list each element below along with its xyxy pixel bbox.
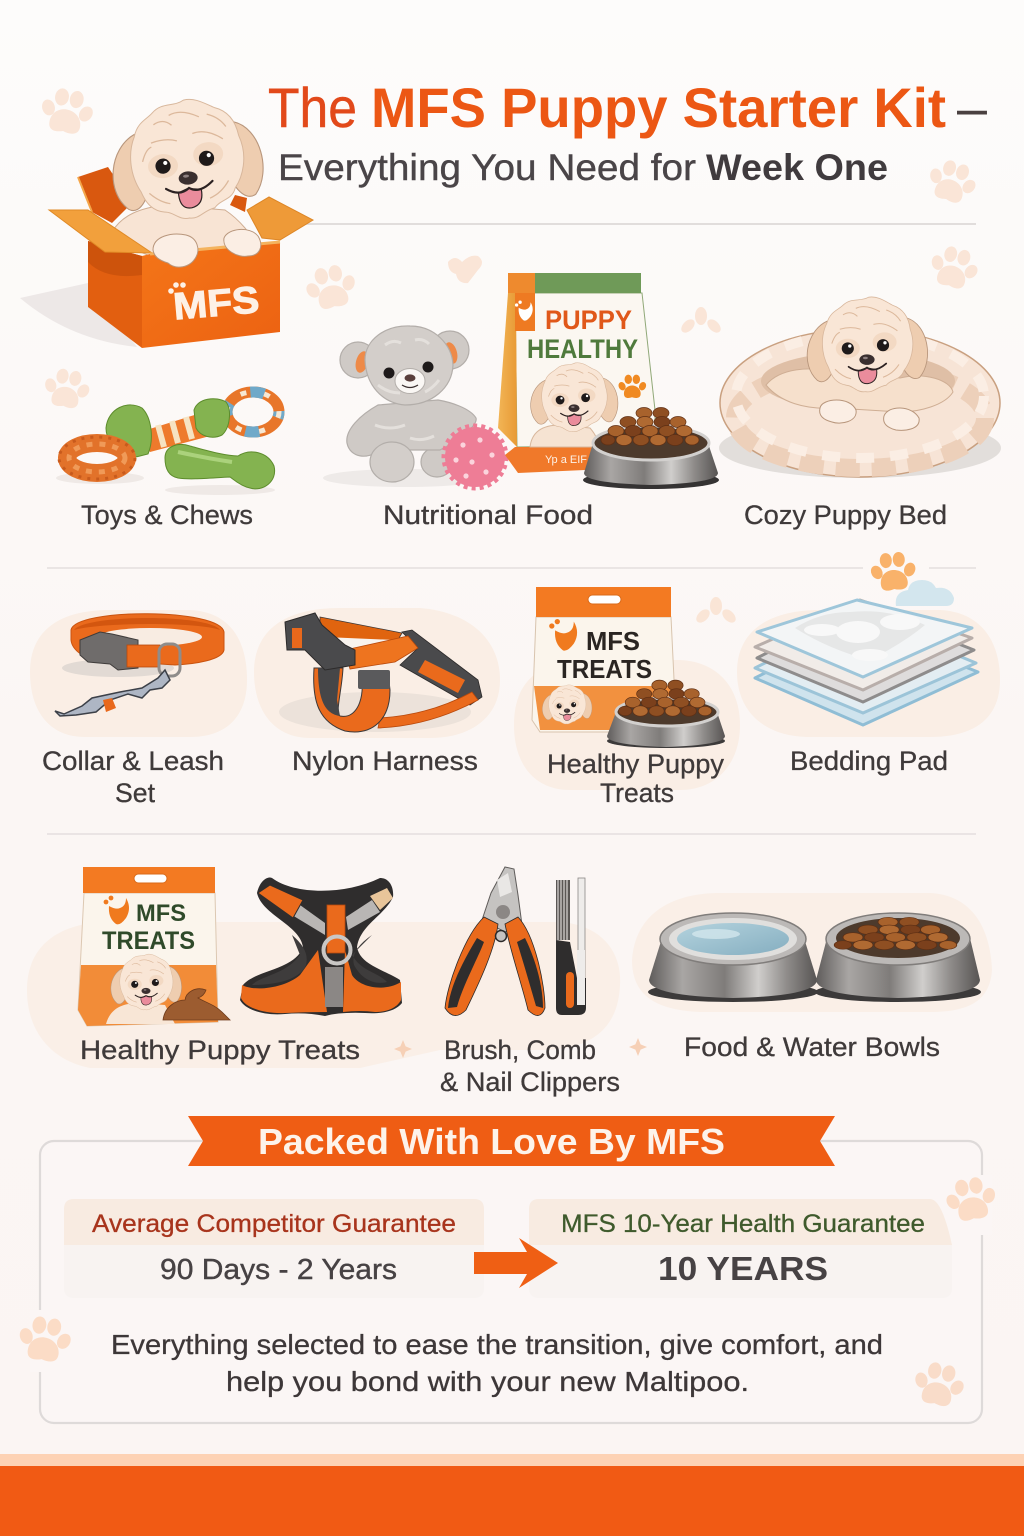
closing text: help you bond with your new Maltipoo. [226, 1366, 749, 1397]
row 3 background blobs [27, 893, 992, 1068]
label: bedding pad: Bedding Pad [790, 746, 948, 776]
footer band [0, 1454, 1024, 1536]
icon: nylon harness [279, 613, 482, 732]
icon: treats bag and bowl [532, 587, 725, 748]
icon: puppy food bag and bowl [498, 273, 719, 489]
table: average competitor [64, 1199, 484, 1298]
panel: guarantee [14, 1141, 1001, 1423]
icon: stacked bedding pads with sun paw and cloud [755, 550, 978, 725]
icon: treats bag: TREATS [102, 927, 195, 955]
icon: collar and leash [55, 614, 224, 716]
icon: puppy in MFS box: MFS [172, 279, 261, 329]
label: food and water bowls: Food & Water Bowls [684, 1032, 940, 1062]
label: nylon harness: Nylon Harness [292, 746, 478, 776]
panel paws [14, 1174, 1001, 1410]
title: The [268, 76, 357, 139]
background paw prints [36, 85, 984, 625]
icon: sparkle divider [394, 1040, 412, 1058]
label: brush comb and nail clippers: Brush, Comb [444, 1035, 596, 1065]
label: healthy puppy treats: Healthy Puppy [547, 749, 725, 779]
icon: plush teddy and pink ball [323, 326, 506, 488]
label: cozy puppy bed: Cozy Puppy Bed [744, 500, 947, 530]
icon: puppy food bag and bowl: PUPPY [545, 305, 632, 335]
label: healthy puppy treats: Treats [600, 778, 674, 808]
label: collar and leash set [42, 746, 224, 808]
banner [188, 1116, 835, 1166]
icon: puppy food bag and bowl: Yp a EIF U [545, 454, 598, 466]
table: average competitor: 90 Days - 2 Years [160, 1254, 397, 1286]
subtitle: Everything You Need for [278, 147, 696, 188]
icon: sparkle divider [629, 1038, 647, 1056]
icon: padded puppy harness [240, 878, 402, 1016]
label: brush comb and nail clippers [440, 1035, 620, 1097]
icon: treats bag and bowl: TREATS [557, 654, 652, 684]
icon: toys and chews [56, 392, 279, 495]
icon: puppy food bag and bowl: HEALTHY [527, 334, 638, 364]
table: MFS guarantee: 10 YEARS [658, 1250, 828, 1287]
closing text: Everything selected to ease the transition, give comfort, and [111, 1329, 883, 1360]
icon: puppy in MFS box [20, 93, 313, 348]
label: collar and leash set: Set [115, 778, 156, 808]
arrow [474, 1238, 558, 1288]
label: brush comb and nail clippers: & Nail Clippers [440, 1067, 620, 1097]
label: toys and chews: Toys & Chews [81, 500, 253, 530]
closing text [111, 1329, 883, 1397]
icon: treats bag and bowl: MFS [586, 626, 640, 656]
subtitle [278, 147, 888, 188]
table: MFS guarantee [529, 1199, 952, 1298]
icon: treats bag [78, 867, 230, 1026]
label: healthy puppy treats row three: Healthy Puppy Treats [80, 1035, 360, 1065]
label: collar and leash set: Collar & Leash [42, 746, 224, 776]
table: MFS guarantee: MFS 10-Year Health Guarantee [561, 1210, 925, 1238]
table: average competitor: Average Competitor Guarantee [92, 1210, 456, 1238]
icon: cozy puppy bed [719, 297, 1001, 478]
icon: nail clippers and comb [445, 867, 586, 1016]
icon: treats bag: MFS [136, 900, 186, 927]
subtitle: Week One [706, 147, 888, 188]
row 2 background blobs [30, 608, 1000, 790]
title: MFS Puppy Starter Kit [371, 76, 946, 139]
label: nutritional food: Nutritional Food [383, 500, 593, 530]
icon: food and water bowls [648, 913, 981, 1002]
banner: Packed With Love By MFS [258, 1121, 725, 1162]
title: – [957, 76, 988, 139]
label: healthy puppy treats [547, 749, 725, 808]
